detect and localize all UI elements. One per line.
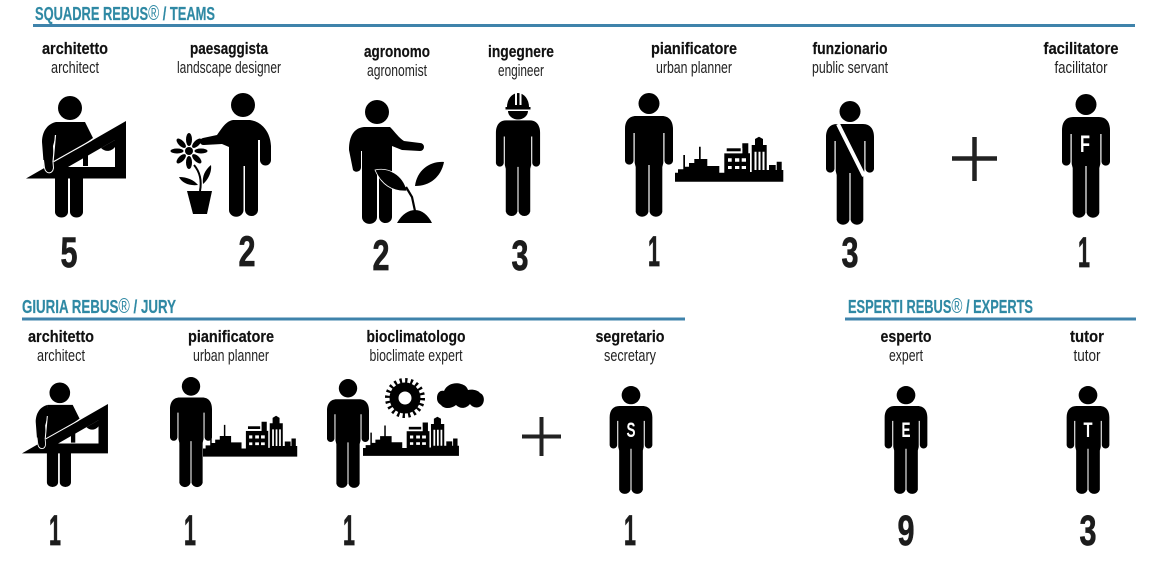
role: bioclimate expert: 1	[343, 507, 355, 555]
role: jury architect: architetto	[28, 327, 94, 346]
role: landscape designer: landscape designer	[177, 59, 281, 77]
role: secretary	[596, 327, 664, 555]
role: agronomist: agronomo	[364, 42, 430, 61]
panel: experts	[845, 295, 1136, 555]
role: public servant: funzionario	[812, 39, 888, 58]
role: secretary: 1	[624, 507, 636, 555]
role: secretary: segretario	[596, 327, 664, 346]
panel: jury	[22, 295, 685, 555]
role: engineer: engineer	[498, 62, 544, 80]
role: jury urban planner: 1	[184, 507, 196, 555]
role: tutor: 3	[1080, 507, 1096, 555]
role: jury architect: architect	[37, 347, 85, 365]
role: urban planner	[625, 39, 783, 276]
role: architect: architetto	[42, 39, 108, 58]
role: facilitator: facilitator	[1054, 59, 1108, 77]
role: public servant: public servant	[812, 59, 888, 77]
role: architect: architect	[51, 59, 99, 77]
role: jury urban planner: urban planner	[193, 347, 269, 365]
role: engineer: 3	[512, 232, 528, 280]
role: expert: E	[902, 419, 910, 442]
role: bioclimate expert: bioclimatologo	[366, 327, 466, 346]
role: facilitator: F	[1080, 131, 1090, 158]
role: tutor	[1067, 327, 1109, 555]
panel: teams	[26, 2, 1135, 280]
role: facilitator: 1	[1078, 229, 1090, 277]
role: public servant: 3	[842, 229, 858, 277]
role: jury architect	[22, 327, 108, 555]
role: jury urban planner	[170, 327, 297, 555]
role: engineer	[488, 42, 554, 280]
role: landscape designer	[170, 39, 281, 276]
heading: jury: GIURIA REBUS® / JURY	[22, 295, 176, 318]
role: engineer: ingegnere	[488, 42, 554, 61]
role: tutor: T	[1084, 419, 1093, 442]
role: tutor: tutor	[1070, 327, 1104, 346]
heading: experts: ESPERTI REBUS® / EXPERTS	[848, 295, 1033, 318]
role: jury architect: 1	[49, 507, 61, 555]
role: agronomist: agronomist	[367, 62, 427, 80]
role: secretary: S	[626, 419, 636, 442]
role: facilitator: facilitatore	[1044, 39, 1118, 58]
role: expert: 9	[898, 507, 914, 555]
role: architect: 5	[60, 229, 78, 277]
role: agronomist	[349, 42, 444, 280]
role: urban planner: 1	[648, 228, 660, 276]
role: expert: expert	[889, 347, 923, 365]
role: landscape designer: paesaggista	[190, 39, 268, 58]
heading: teams: SQUADRE REBUS® / TEAMS	[35, 2, 215, 25]
role: architect	[26, 39, 126, 277]
role: public servant	[812, 39, 888, 277]
role: secretary: secretary	[604, 347, 657, 365]
role: bioclimate expert: bioclimate expert	[370, 347, 463, 365]
plus sign	[522, 417, 561, 456]
plus sign	[952, 137, 997, 181]
role: urban planner: urban planner	[656, 59, 732, 77]
role: jury urban planner: pianificatore	[188, 327, 274, 346]
role: tutor: tutor	[1074, 347, 1101, 365]
role: landscape designer: 2	[238, 228, 256, 276]
role: urban planner: pianificatore	[651, 39, 737, 58]
role: expert	[880, 327, 932, 555]
role: expert: esperto	[880, 327, 932, 346]
role: facilitator	[1044, 39, 1118, 277]
role: bioclimate expert	[327, 327, 484, 555]
role: agronomist: 2	[372, 232, 390, 280]
